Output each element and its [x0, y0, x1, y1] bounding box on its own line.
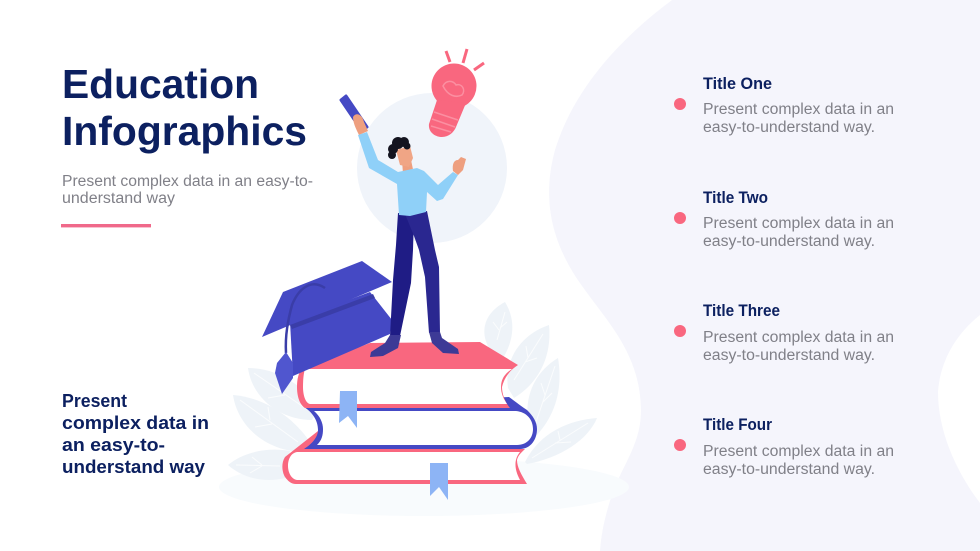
decorative leaves — [228, 302, 597, 480]
book stack — [282, 342, 537, 500]
pen — [341, 96, 367, 131]
top book — [297, 342, 518, 408]
hair — [388, 137, 410, 159]
subtitle: Present complex data in an easy-to- — [62, 173, 313, 190]
left leg — [390, 213, 414, 336]
item: title two: Title Two — [703, 189, 768, 207]
leaf veins — [236, 312, 588, 473]
bottom book — [282, 431, 527, 484]
accent underline — [61, 224, 151, 227]
bookmark: top book — [339, 391, 357, 428]
item: title one — [674, 75, 894, 136]
item: title three: easy-to-understand way. — [703, 347, 875, 364]
callout text: an easy-to- — [62, 434, 165, 455]
callout text: Present — [62, 390, 127, 411]
person — [341, 96, 466, 357]
item: title four — [674, 416, 894, 478]
ground shadow — [219, 458, 629, 516]
callout text — [62, 390, 209, 477]
right hand — [453, 157, 466, 175]
background blob — [549, 0, 980, 551]
item: title one: easy-to-understand way. — [703, 119, 875, 136]
item: title two — [674, 189, 894, 250]
face — [396, 146, 413, 167]
item: title two: Present complex data in an — [703, 215, 894, 232]
background circle — [357, 93, 507, 243]
item: title two: easy-to-understand way. — [703, 233, 875, 250]
right shoe — [429, 332, 459, 354]
item: title three: Present complex data in an — [703, 329, 894, 346]
bulb rays — [446, 49, 484, 70]
item: title three: Title Three — [703, 302, 780, 320]
title: Education — [62, 61, 259, 107]
callout text: understand way — [62, 456, 206, 477]
bookmark: bottom book — [430, 463, 448, 500]
raised hand — [353, 114, 368, 135]
subtitle — [62, 173, 313, 207]
neck — [402, 160, 414, 174]
item: title four: easy-to-understand way. — [703, 461, 875, 478]
left shoe — [370, 335, 401, 357]
title line two: Infographics — [62, 108, 307, 154]
light bulb — [429, 49, 484, 137]
item: title four: Title Four — [703, 416, 773, 434]
item: title one: Title One — [703, 75, 772, 93]
middle book — [304, 397, 537, 449]
subtitle: understand way — [62, 190, 175, 207]
item: title one: Present complex data in an — [703, 101, 894, 118]
sweater — [358, 132, 458, 216]
item: title three — [674, 302, 894, 364]
item: title four: Present complex data in an — [703, 443, 894, 460]
right leg — [405, 211, 440, 333]
callout text: complex data in — [62, 412, 209, 433]
graduation cap — [262, 261, 392, 394]
